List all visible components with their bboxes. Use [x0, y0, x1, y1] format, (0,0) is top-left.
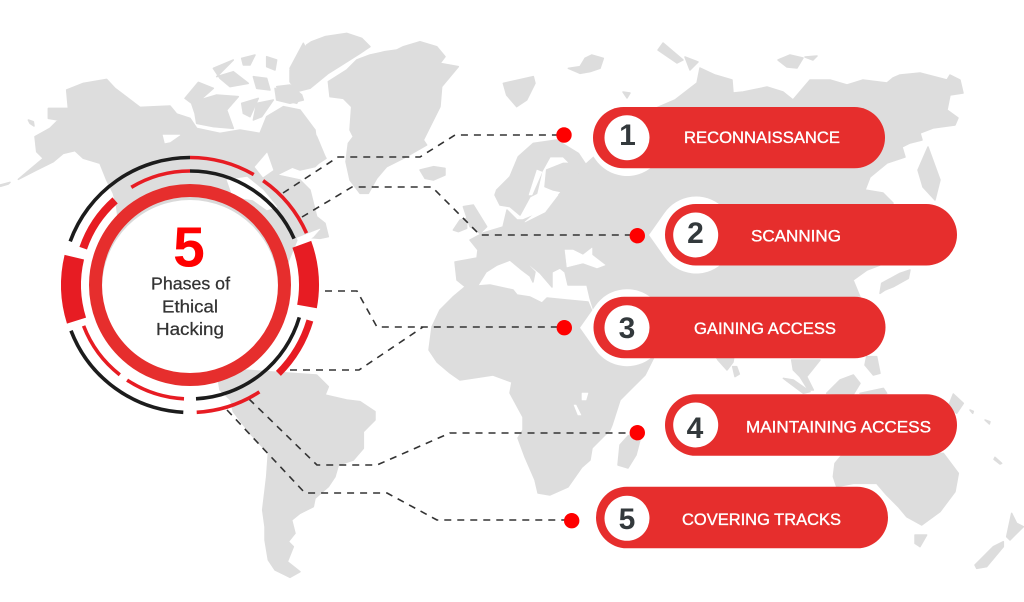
label: MAINTAINING ACCESS: [746, 419, 931, 437]
thin black arc segments: [70, 158, 299, 412]
big number 5: 5: [173, 216, 205, 280]
land: arctic russian islands: [623, 43, 817, 98]
white teardrop halo: [649, 196, 735, 274]
connector 2: [302, 187, 632, 235]
connector 1: [283, 135, 558, 193]
white teardrop halo: [649, 386, 734, 464]
medium arc segments: [83, 200, 310, 373]
phase 3 gaining access: [557, 289, 886, 366]
land: svalbard: [503, 77, 535, 107]
center title: Phases of: [151, 273, 230, 293]
white teardrop halo: [580, 480, 666, 557]
pill: [594, 297, 886, 358]
land: asia pacific and oceania: [733, 270, 1023, 568]
number badge: [673, 212, 718, 258]
land: franz josef land: [568, 55, 603, 73]
red dot: [630, 228, 645, 243]
pill: [665, 204, 957, 266]
pill: [665, 394, 957, 456]
pill: [593, 107, 885, 168]
land: iceland: [420, 167, 445, 180]
label: SCANNING: [751, 228, 841, 246]
phase 5 covering tracks: [564, 480, 888, 557]
water: inland seas: [163, 135, 605, 415]
number: 2: [687, 217, 704, 250]
thin red arc segments: [84, 158, 306, 412]
pill: [596, 487, 888, 548]
number badge: [604, 115, 650, 160]
label: RECONNAISSANCE: [684, 129, 840, 147]
phase 4 maintaining access: [630, 386, 957, 464]
land: ireland: [453, 218, 467, 232]
white teardrop halo: [580, 289, 666, 366]
connector 3 lower: [290, 327, 423, 370]
number: 4: [687, 412, 704, 445]
red dot: [564, 513, 579, 528]
center title: Hacking: [156, 319, 224, 339]
connector lines: [227, 135, 632, 520]
ring backing disc: [98, 193, 282, 377]
label: COVERING TRACKS: [682, 511, 841, 529]
land: north america: [0, 43, 328, 287]
land: eurasia: [455, 68, 963, 370]
white teardrop halo: [580, 99, 666, 176]
land: madagascar: [618, 432, 642, 468]
red dot: [557, 320, 572, 335]
connector 3 upper: [325, 291, 558, 327]
central phases ring: [70, 158, 310, 412]
connector 5: [227, 410, 565, 520]
land: south america: [207, 357, 375, 577]
land: africa: [429, 285, 660, 495]
phase 1 reconnaissance: [556, 99, 885, 176]
number badge: [604, 496, 650, 541]
label: GAINING ACCESS: [694, 320, 836, 338]
number: 5: [619, 503, 635, 536]
thick arc segments: [71, 244, 309, 321]
phase 2 scanning: [630, 196, 957, 274]
number badge: [673, 402, 718, 448]
center title: Ethical: [162, 296, 218, 316]
number badge: [604, 305, 650, 350]
number: 1: [619, 119, 636, 152]
land: kamchatka: [918, 147, 940, 200]
land: scandinavia: [495, 140, 585, 215]
connector 4: [249, 399, 632, 465]
red dot: [556, 127, 572, 143]
red dot: [630, 425, 645, 440]
land: great britain: [463, 205, 487, 233]
center title: [151, 273, 230, 339]
main red ring: [96, 190, 284, 380]
number: 3: [619, 312, 635, 345]
land: greenland and arctic canada: [270, 33, 603, 233]
